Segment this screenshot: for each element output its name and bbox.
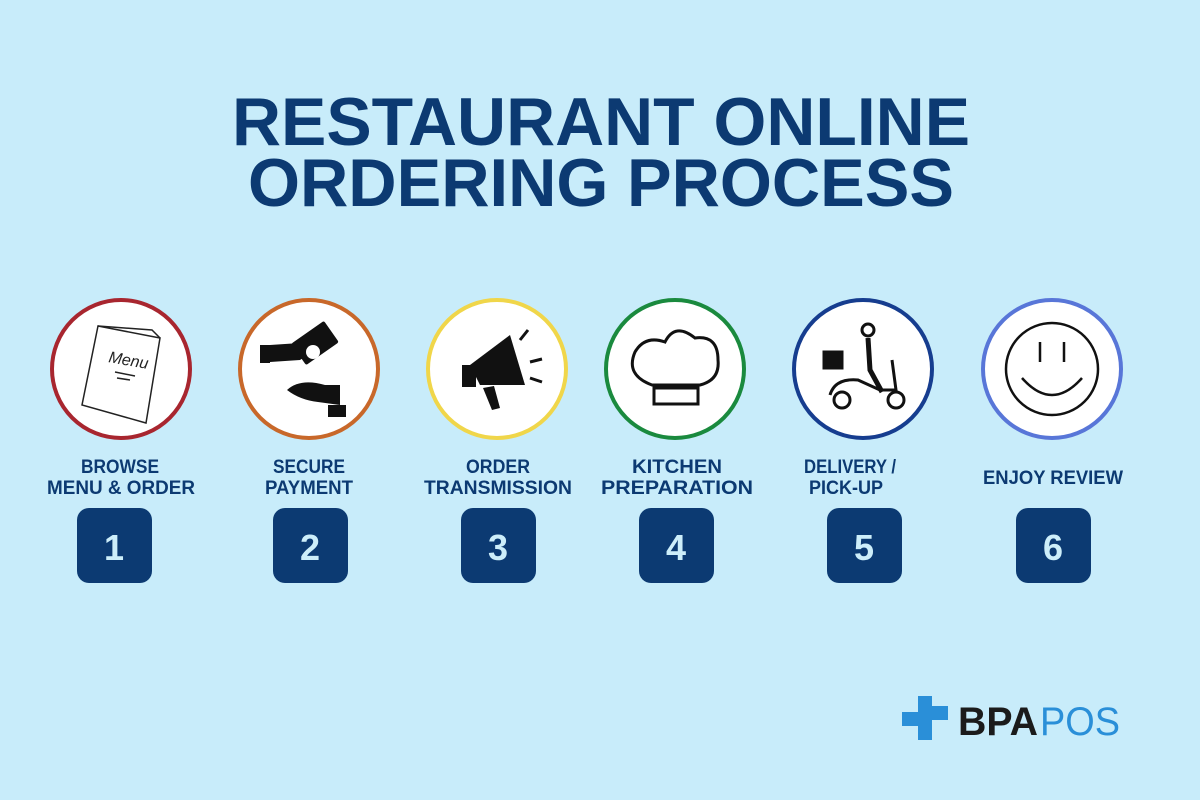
step 5: delivery: DELIVERY / bbox=[804, 457, 897, 478]
step 2: secure payment: 2 bbox=[300, 527, 320, 568]
step 1: browse menu: 1 bbox=[104, 527, 124, 568]
title: ORDERING PROCESS bbox=[248, 145, 954, 221]
icon: scooter bbox=[824, 324, 904, 408]
title bbox=[232, 84, 970, 221]
step 1: browse menu: BROWSE bbox=[81, 457, 159, 478]
logo: BPA POS: POS bbox=[1040, 700, 1120, 744]
step 4: kitchen preparation: 4 bbox=[666, 527, 686, 568]
icon: megaphone bbox=[462, 330, 542, 410]
step 3: order transmission bbox=[424, 300, 572, 583]
step 2: secure payment bbox=[240, 300, 378, 583]
step 3: order transmission: 3 bbox=[488, 527, 508, 568]
step 6: enjoy review: 6 bbox=[1043, 527, 1063, 568]
icon: menu book bbox=[82, 326, 160, 423]
step 5: delivery bbox=[794, 300, 932, 583]
step 4: kitchen preparation: KITCHEN bbox=[632, 457, 722, 478]
step 3: order transmission: TRANSMISSION bbox=[424, 478, 572, 499]
title: RESTAURANT ONLINE bbox=[232, 84, 970, 160]
icon: chef hat bbox=[632, 331, 718, 404]
icon: hand money bbox=[260, 321, 346, 417]
step 6: enjoy review: ENJOY REVIEW bbox=[983, 468, 1123, 489]
step 1: browse menu: MENU & ORDER bbox=[47, 478, 195, 499]
step 2: secure payment: PAYMENT bbox=[265, 478, 353, 499]
step 5: delivery: 5 bbox=[854, 527, 874, 568]
logo: BPA POS: BPA bbox=[958, 700, 1038, 744]
logo: BPA POS bbox=[902, 696, 1120, 744]
step 4: kitchen preparation: PREPARATION bbox=[601, 478, 753, 499]
step 3: order transmission: ORDER bbox=[466, 457, 530, 478]
step 6: enjoy review bbox=[983, 300, 1123, 583]
step 1: browse menu bbox=[47, 300, 195, 583]
step 4: kitchen preparation bbox=[601, 300, 753, 583]
icon: menu book: Menu bbox=[107, 349, 150, 373]
step 5: delivery: PICK-UP bbox=[809, 478, 883, 499]
icon: smiley bbox=[1006, 323, 1098, 415]
step 2: secure payment: SECURE bbox=[273, 457, 345, 478]
